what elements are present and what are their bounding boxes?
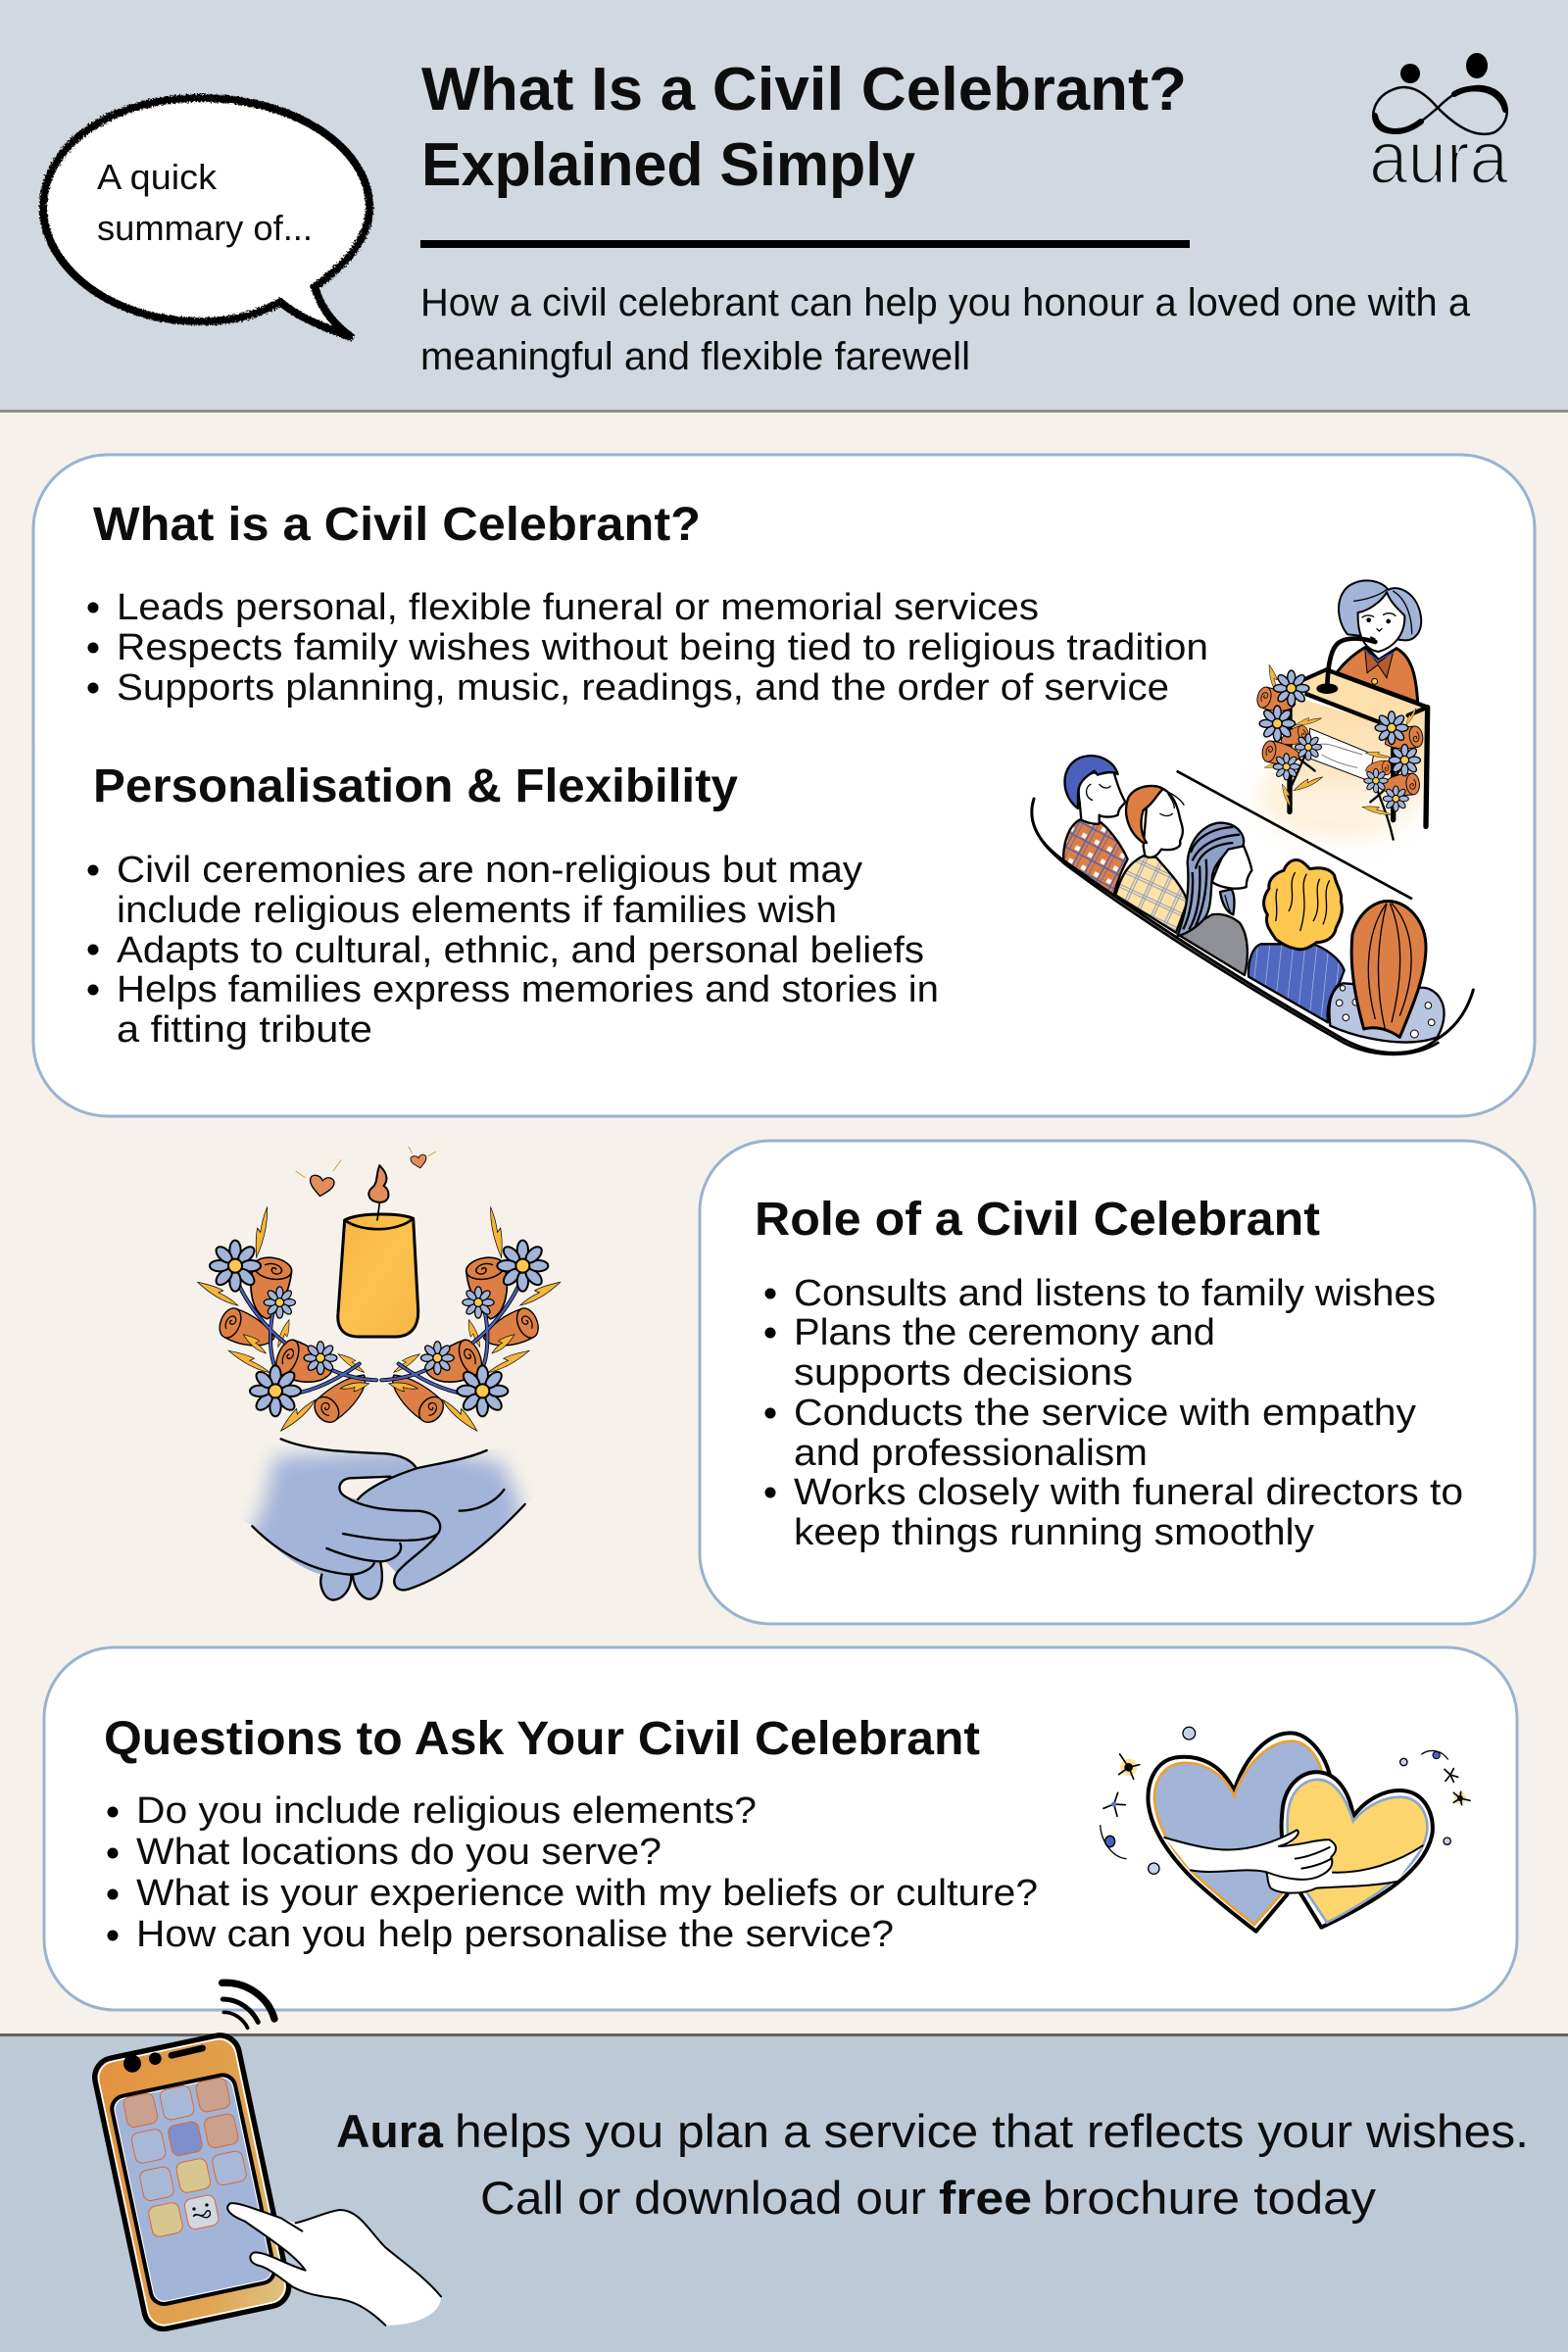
- heading: what is a civil celebrant: What is a Civil Celebrant?: [93, 499, 701, 551]
- bullet list: definition: Respects family wishes without being tied to religious tradition: [117, 627, 1208, 668]
- bullet list: personalisation: Civil ceremonies are non-religious but may: [117, 850, 862, 891]
- title: Explained Simply: [421, 131, 915, 199]
- wreath: left branch: [196, 1206, 376, 1434]
- subtitle: [420, 281, 1471, 378]
- bullet list: questions: How can you help personalise the service?: [136, 1914, 894, 1955]
- bullet list: role: Works closely with funeral directors to: [794, 1472, 1463, 1513]
- panel: role of a civil celebrant: [700, 1141, 1535, 1624]
- heading: role: Role of a Civil Celebrant: [755, 1194, 1320, 1246]
- illustration: celebrant at lectern and seated mourners: [1032, 580, 1473, 1054]
- person 3: [1178, 823, 1251, 975]
- call to action: free: [939, 2172, 1032, 2224]
- icon: flying hearts: [296, 1147, 436, 1199]
- bullet list: personalisation: Helps families express memories and stories in: [117, 969, 939, 1010]
- bullet list: questions: What is your experience with my beliefs or culture?: [136, 1873, 1038, 1914]
- speech bubble: A quick summary of: summary of...: [97, 208, 313, 248]
- bullet list: personalisation: a fitting tribute: [117, 1009, 372, 1051]
- heading: questions: Questions to Ask Your Civil Celebrant: [104, 1713, 980, 1765]
- logo: aura: aura: [1369, 117, 1509, 200]
- bullet list: definition: Supports planning, music, readings, and the order of service: [117, 667, 1169, 709]
- bullet list: role: [764, 1273, 1463, 1553]
- bullet list: questions: What locations do you serve?: [136, 1832, 662, 1873]
- subtitle: meaningful and flexible farewell: [420, 335, 970, 378]
- call to action: Aura: [336, 2105, 444, 2157]
- bullet list: role: Conducts the service with empathy: [794, 1393, 1416, 1434]
- bullet list: definition: Leads personal, flexible funeral or memorial services: [117, 587, 1039, 628]
- bullet list: personalisation: [88, 850, 939, 1051]
- bullet list: role: and professionalism: [794, 1433, 1148, 1474]
- person 2: [1115, 786, 1188, 933]
- call to action: [336, 2105, 1529, 2224]
- call to action: Call or download our: [480, 2172, 926, 2224]
- icon: phone and hand: [91, 1983, 441, 2332]
- bullet list: role: Plans the ceremony and: [794, 1312, 1215, 1353]
- icon: celebrant at lectern: [1255, 580, 1428, 840]
- panel: questions to ask: [44, 1647, 1517, 2010]
- speech bubble: A quick summary of: [43, 98, 369, 338]
- icon: seated mourners on bench: [1032, 756, 1473, 1054]
- bullet list: role: supports decisions: [794, 1352, 1133, 1394]
- title: [421, 56, 1187, 199]
- person 5: [1329, 901, 1445, 1042]
- icon: embracing hearts: [1101, 1727, 1470, 1932]
- illustration: candle wreath and clasped hands: [196, 1147, 562, 1620]
- person 4: [1249, 859, 1345, 1022]
- bullet list: personalisation: Adapts to cultural, ethnic, and personal beliefs: [117, 930, 924, 971]
- bullet list: questions: Do you include religious elements?: [136, 1790, 757, 1832]
- call to action: brochure today: [1043, 2172, 1377, 2224]
- title: What Is a Civil Celebrant?: [421, 56, 1187, 123]
- bullet list: definition: [88, 587, 1208, 709]
- logo: aura: [1369, 53, 1509, 200]
- bullet list: personalisation: include religious elements if families wish: [117, 890, 837, 931]
- icon: clasped hands: [242, 1439, 525, 1620]
- person 1: [1063, 756, 1128, 895]
- icon: floral wreath: [196, 1206, 562, 1434]
- subtitle: How a civil celebrant can help you honour a loved one with a: [420, 281, 1471, 324]
- speech bubble: A quick summary of: A quick: [97, 157, 218, 197]
- icon: candle: [338, 1165, 418, 1337]
- bullet list: role: keep things running smoothly: [794, 1512, 1314, 1553]
- call to action: helps you plan a service that reflects your wishes.: [455, 2105, 1529, 2157]
- footer band: [0, 1983, 1568, 2352]
- title rule: [420, 240, 1190, 248]
- bullet list: questions: [108, 1790, 1038, 1955]
- header band: [0, 0, 1568, 413]
- heading: personalisation and flexibility: Personalisation & Flexibility: [93, 760, 738, 812]
- bullet list: role: Consults and listens to family wishes: [794, 1273, 1436, 1314]
